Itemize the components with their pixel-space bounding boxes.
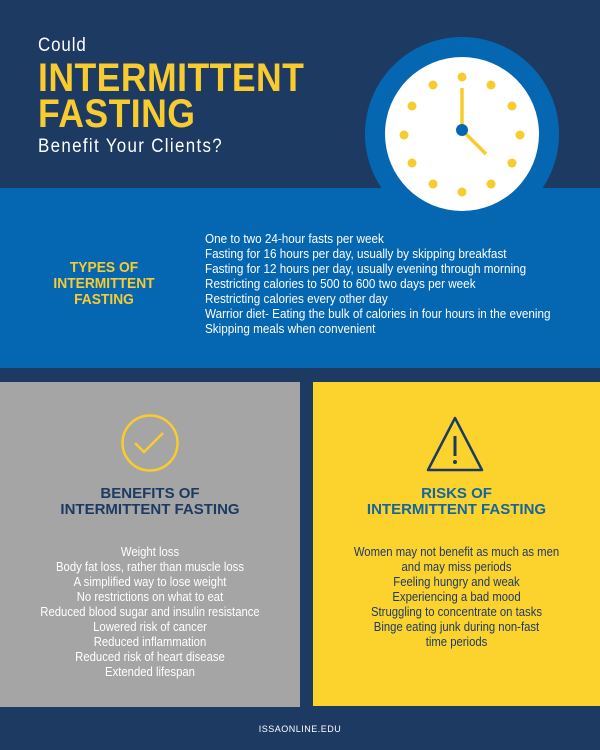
title: INTERMITTENT (38, 56, 304, 100)
risks heading (367, 485, 546, 518)
title: Benefit Your Clients? (38, 136, 223, 157)
panel: benefits (0, 382, 300, 707)
benefits list (40, 544, 260, 679)
title: FASTING (38, 92, 195, 136)
types list (205, 231, 551, 336)
icon: warning (426, 416, 484, 472)
panel: risks (313, 382, 600, 706)
types list: Skipping meals when convenient (205, 321, 375, 336)
types list: One to two 24-hour fasts per week (205, 231, 384, 246)
clock icon (365, 37, 559, 211)
risks list: Struggling to concentrate on tasks (371, 604, 542, 619)
risks heading: RISKS OF (421, 485, 492, 502)
risks list: time periods (426, 634, 487, 649)
title (38, 35, 304, 157)
footer: ISSAONLINE.EDU (259, 724, 341, 734)
types heading (53, 259, 155, 308)
header background (0, 0, 600, 188)
benefits list: A simplified way to lose weight (74, 574, 226, 589)
types list: Fasting for 12 hours per day, usually evening through morning (205, 261, 526, 276)
benefits list: Body fat loss, rather than muscle loss (56, 559, 244, 574)
benefits heading: INTERMITTENT FASTING (60, 501, 240, 518)
benefits list: Reduced blood sugar and insulin resistance (40, 604, 260, 619)
benefits list: Reduced inflammation (94, 634, 206, 649)
types heading: FASTING (74, 291, 134, 308)
benefits list: Weight loss (121, 544, 179, 559)
risks list: Binge eating junk during non-fast (374, 619, 539, 634)
benefits list: Lowered risk of cancer (93, 619, 207, 634)
risks list (354, 544, 559, 649)
types band (0, 188, 600, 368)
title: Could (38, 35, 87, 56)
types heading: TYPES OF (70, 259, 138, 276)
icon: check (121, 414, 179, 472)
benefits heading (60, 485, 240, 518)
risks list: Feeling hungry and weak (393, 574, 520, 589)
types list: Restricting calories every other day (205, 291, 388, 306)
risks list: Women may not benefit as much as men (354, 544, 559, 559)
risks heading: INTERMITTENT FASTING (367, 501, 546, 518)
risks list: Experiencing a bad mood (392, 589, 521, 604)
benefits list: Extended lifespan (105, 664, 195, 679)
benefits list: Reduced risk of heart disease (75, 649, 225, 664)
benefits list: No restrictions on what to eat (77, 589, 223, 604)
types list: Restricting calories to 500 to 600 two days per week (205, 276, 476, 291)
types heading: INTERMITTENT (53, 275, 155, 292)
benefits heading: BENEFITS OF (100, 485, 200, 502)
types list: Fasting for 16 hours per day, usually by skipping breakfast (205, 246, 507, 261)
risks list: and may miss periods (401, 559, 512, 574)
types list: Warrior diet- Eating the bulk of calories in four hours in the evening (205, 306, 551, 321)
